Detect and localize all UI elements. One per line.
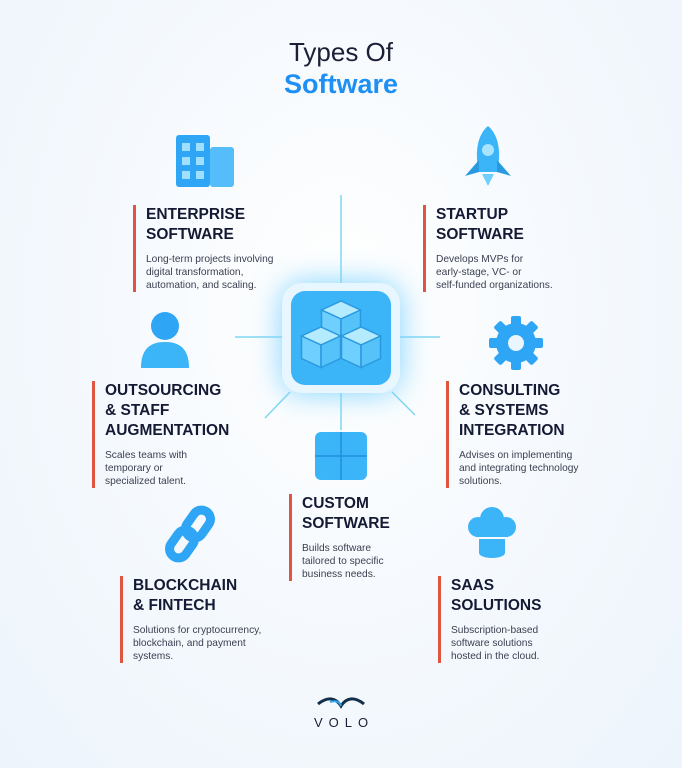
panel: outsourcing: OUTSOURCING [105,382,221,399]
panel: outsourcing [92,381,229,488]
icon: cloud [468,507,516,558]
title: Software [284,69,398,99]
panel: startup: STARTUP [436,206,508,223]
panel: startup: SOFTWARE [436,226,524,243]
panel: consulting: solutions. [459,476,502,487]
panel: consulting: and integrating technology [459,463,579,474]
panel: custom: CUSTOM [302,495,369,512]
panel: consulting: CONSULTING [459,382,560,399]
panel: saas: SOLUTIONS [451,597,541,614]
panel: enterprise: ENTERPRISE [146,206,245,223]
center icon: cubes [282,283,400,393]
icon: enterprise building [176,135,234,187]
panel: enterprise: digital transformation, [146,267,243,278]
panel: consulting [446,381,579,488]
panel: saas: hosted in the cloud. [451,651,539,662]
panel: saas: software solutions [451,638,533,649]
panel: enterprise: Long-term projects involving [146,254,273,265]
panel: saas: Subscription-based [451,625,538,636]
panel: startup: self-funded organizations. [436,280,553,291]
panel: outsourcing: temporary or [105,463,163,474]
panel: custom: SOFTWARE [302,515,390,532]
logo: VOLO [314,715,374,730]
panel: blockchain: BLOCKCHAIN [133,577,237,594]
panel: consulting: & SYSTEMS [459,402,549,419]
panel: custom [289,494,390,581]
panel: enterprise: SOFTWARE [146,226,234,243]
panel: startup: Develops MVPs for [436,254,523,265]
icon: gear [489,316,543,370]
panel: blockchain: Solutions for cryptocurrency, [133,625,261,636]
icon: puzzle [315,432,367,480]
panel: custom: Builds software [302,543,371,554]
panel: consulting: Advises on implementing [459,450,572,461]
panel: consulting: INTEGRATION [459,422,565,439]
panel: blockchain [120,576,261,663]
panel: enterprise: automation, and scaling. [146,280,256,291]
title [284,37,398,99]
panel: outsourcing: specialized talent. [105,476,186,487]
panel: startup [423,205,553,292]
panel: outsourcing: & STAFF [105,402,169,419]
panel: blockchain: systems. [133,651,173,662]
icon: rocket [465,126,511,186]
panel: custom: tailored to specific [302,556,384,567]
panel: outsourcing: AUGMENTATION [105,422,229,439]
icon: person [141,312,189,368]
logo [314,697,374,730]
panel: custom: business needs. [302,569,376,580]
panel: enterprise [133,205,273,292]
title: Types Of [289,37,393,67]
panel: outsourcing: Scales teams with [105,450,187,461]
panel: blockchain: & FINTECH [133,597,216,614]
panel: saas: SAAS [451,577,494,594]
panel: saas [438,576,541,663]
panel: blockchain: blockchain, and payment [133,638,246,649]
panel: startup: early-stage, VC- or [436,267,522,278]
icon: chain [165,506,215,562]
